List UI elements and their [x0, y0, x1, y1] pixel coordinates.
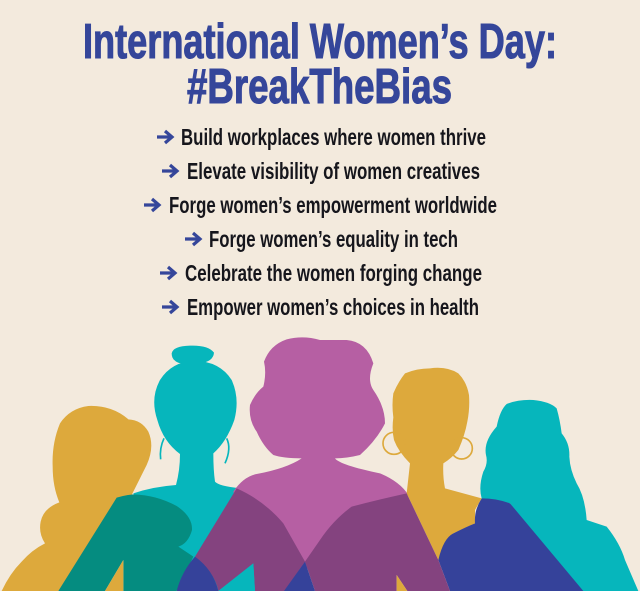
title [83, 15, 557, 114]
overlap: purple left sleeve [195, 488, 305, 591]
overlap: teal wedge [218, 563, 255, 591]
icon: right earring [451, 438, 472, 459]
list item: workplaces: Build workplaces where women thrive [181, 124, 486, 150]
list item: choices in health [162, 294, 479, 320]
silhouettes of five women [2, 337, 638, 591]
list item: equality in tech [185, 226, 458, 252]
list item: choices in health: Empower women’s choices in health [187, 294, 479, 320]
silhouette: right gold woman [383, 368, 482, 560]
list item: empowerment: Forge women’s empowerment worldwide [169, 192, 497, 218]
list item: equality in tech: Forge women’s equality in tech [209, 226, 458, 252]
bullet list [144, 124, 497, 320]
overlap: blue sleeve [438, 498, 583, 591]
overlap: blue panels [177, 557, 315, 591]
list item: workplaces [157, 124, 486, 150]
silhouette: centre teal woman [133, 346, 267, 591]
silhouette: left gold woman [2, 406, 151, 591]
list item: visibility [162, 158, 480, 184]
silhouette: right teal woman [480, 400, 638, 591]
overlap: left gold wedge [105, 560, 123, 591]
silhouette: centre pink woman [233, 337, 408, 570]
overlap: green arm [58, 494, 193, 591]
icon: left earring [383, 432, 405, 454]
overlap: right gold wedge [397, 575, 407, 591]
list item: visibility: Elevate visibility of women creatives [187, 158, 480, 184]
list item: forging change [160, 260, 482, 286]
list item: empowerment [144, 192, 497, 218]
list item: forging change: Celebrate the women forging change [185, 260, 482, 286]
title: #BreakTheBias [187, 60, 452, 114]
overlap: purple right sleeve [305, 493, 450, 591]
